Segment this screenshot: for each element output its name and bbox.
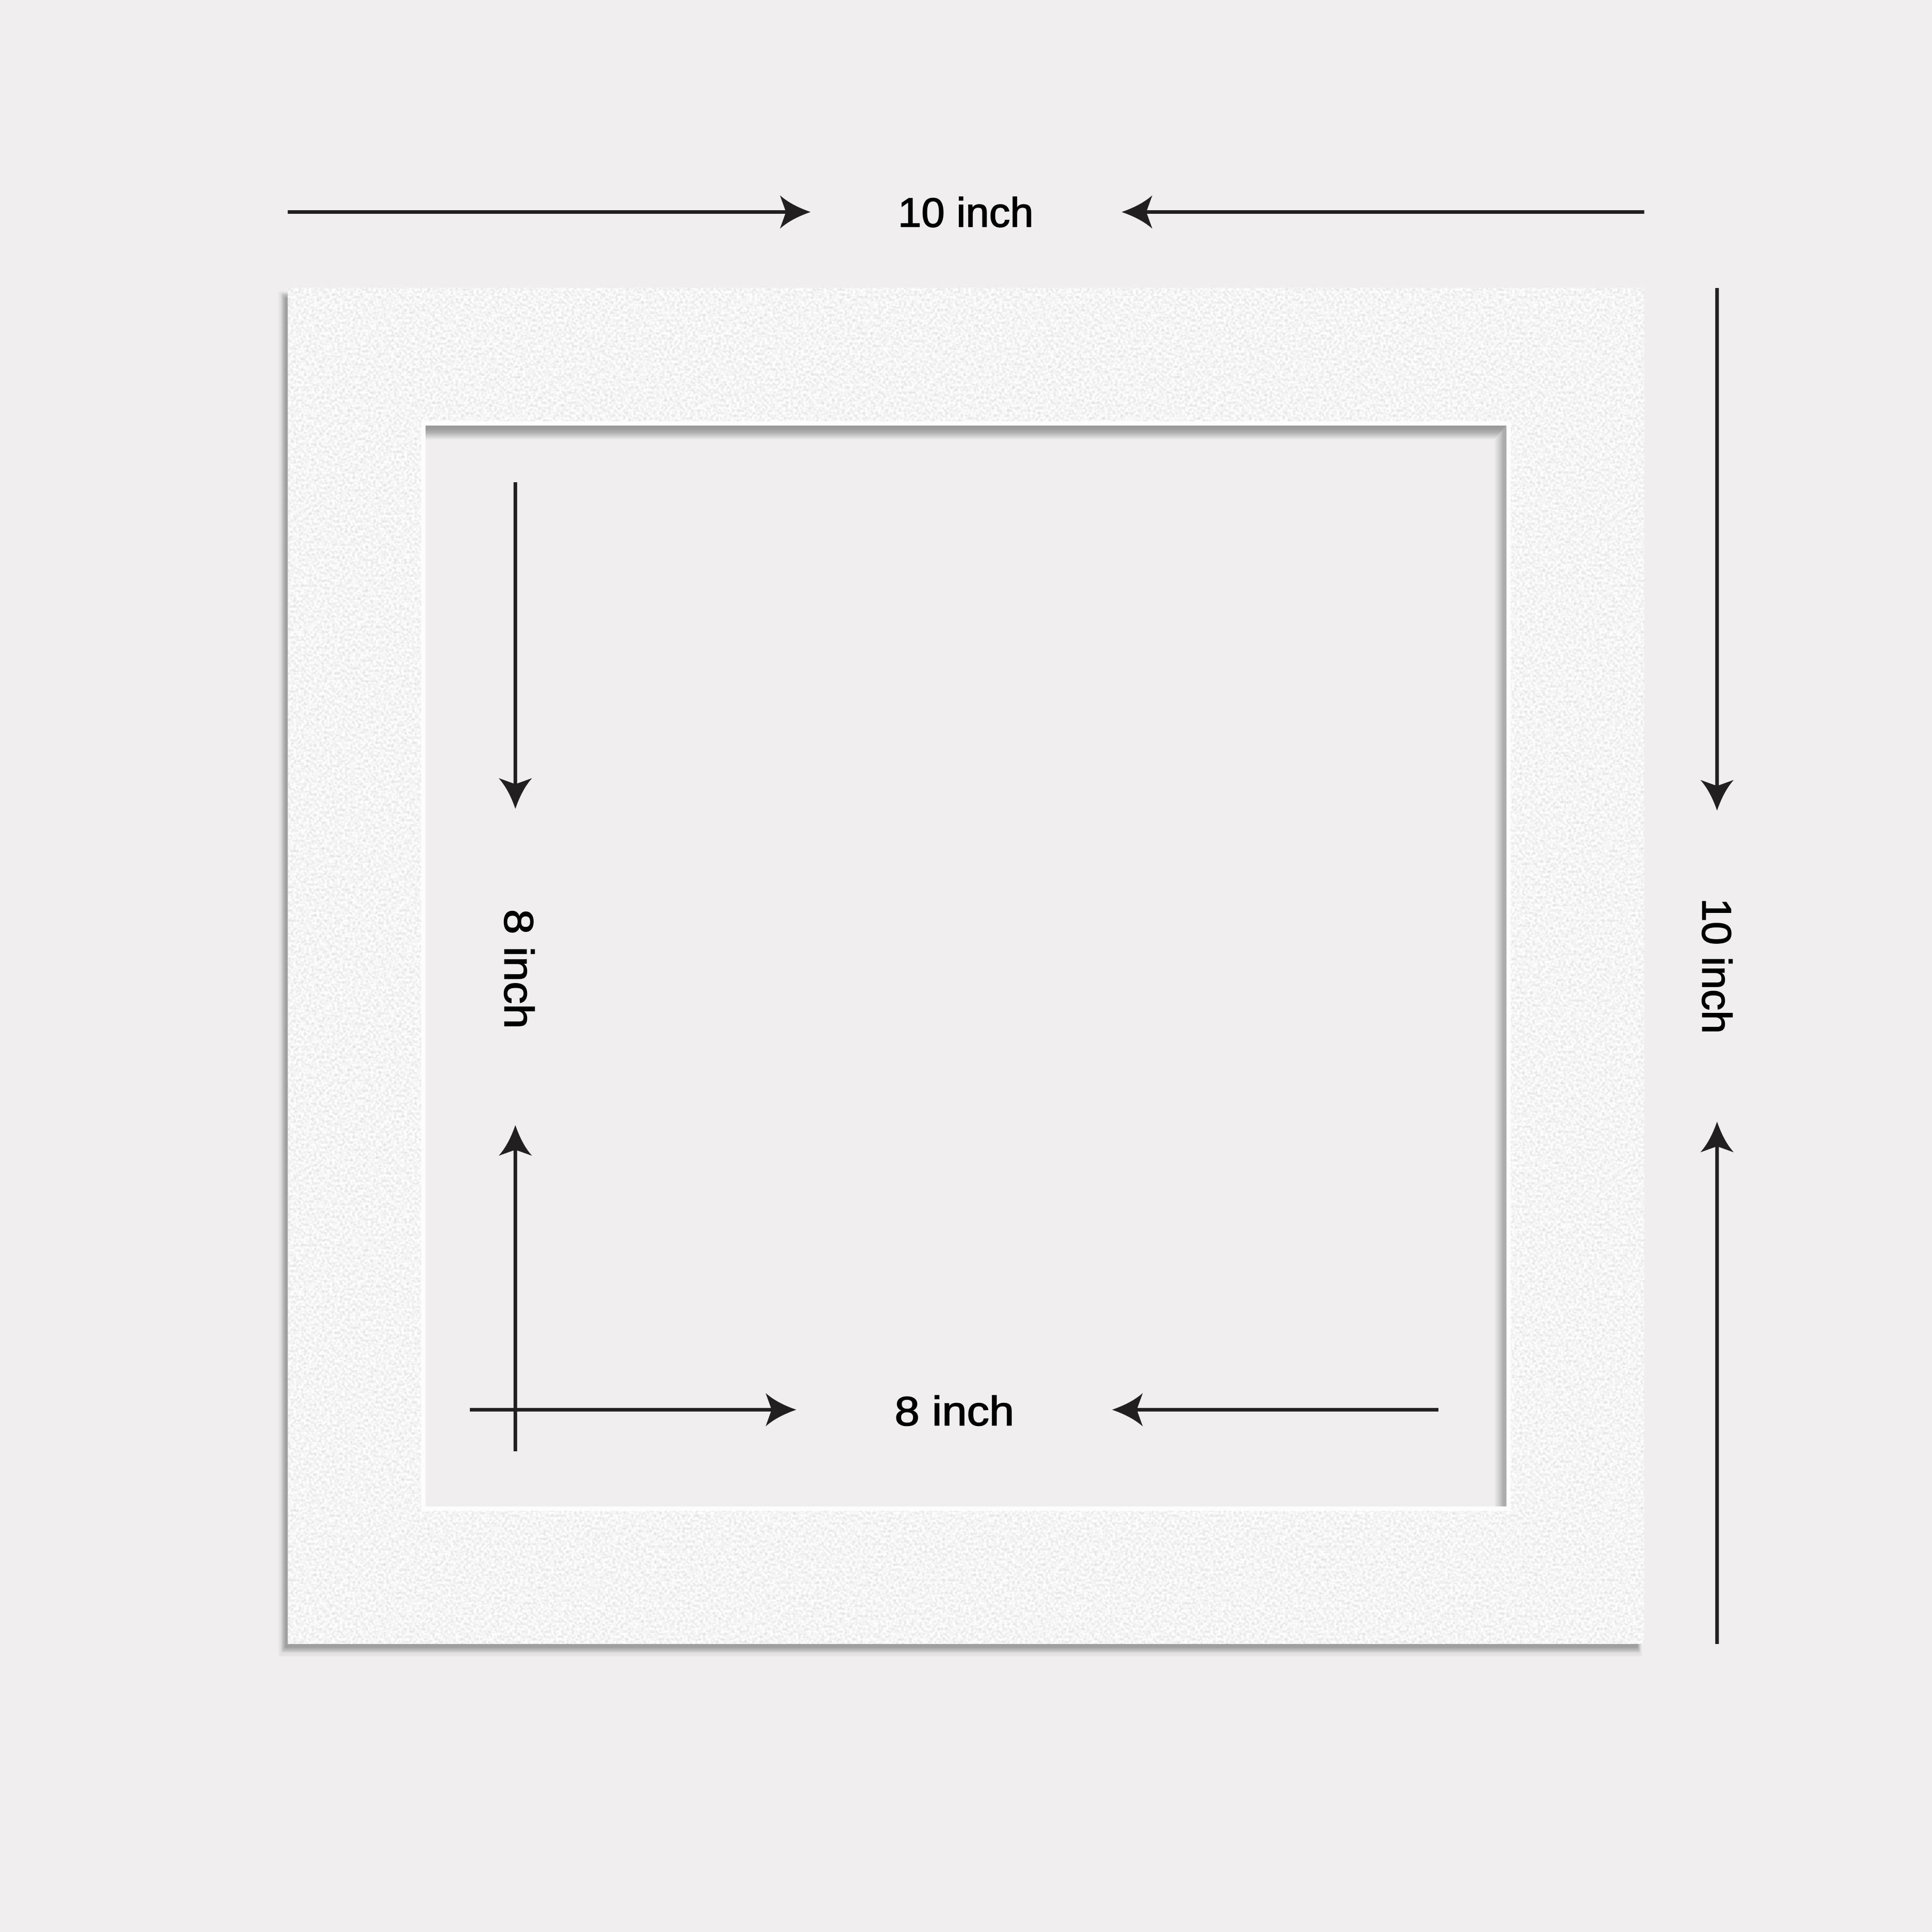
arrow: inner bottom pointing left	[1112, 1393, 1438, 1427]
window opening	[426, 426, 1506, 1506]
panel: mat board frame	[279, 287, 1645, 1656]
label: 8 inch left: 8 inch	[496, 909, 541, 1029]
white bevel around window	[421, 421, 1511, 1511]
label: 10 inch top: 10 inch	[898, 190, 1033, 235]
arrow: top right pointing left	[1122, 195, 1645, 229]
arrow: inner bottom pointing right	[470, 1393, 796, 1427]
window top inner shadow	[426, 426, 1506, 440]
arrow: top left pointing right	[287, 195, 811, 229]
dimension: inner height	[496, 482, 541, 1451]
arrow: inner left pointing down	[499, 482, 532, 809]
label: 8 inch bottom: 8 inch	[894, 1388, 1014, 1434]
arrow: right side pointing down	[1700, 288, 1734, 811]
label: 10 inch right: 10 inch	[1693, 899, 1739, 1033]
dimension: outer height	[1693, 288, 1739, 1644]
textured mat surface	[287, 287, 1645, 1644]
dimension: inner width	[470, 1388, 1438, 1434]
arrow: right side pointing up	[1700, 1122, 1734, 1644]
window right inner shadow	[1494, 426, 1506, 1506]
dimension: outer width	[287, 190, 1645, 235]
outer drop shadow	[279, 292, 1641, 1656]
arrow: inner left pointing up	[499, 1125, 532, 1451]
